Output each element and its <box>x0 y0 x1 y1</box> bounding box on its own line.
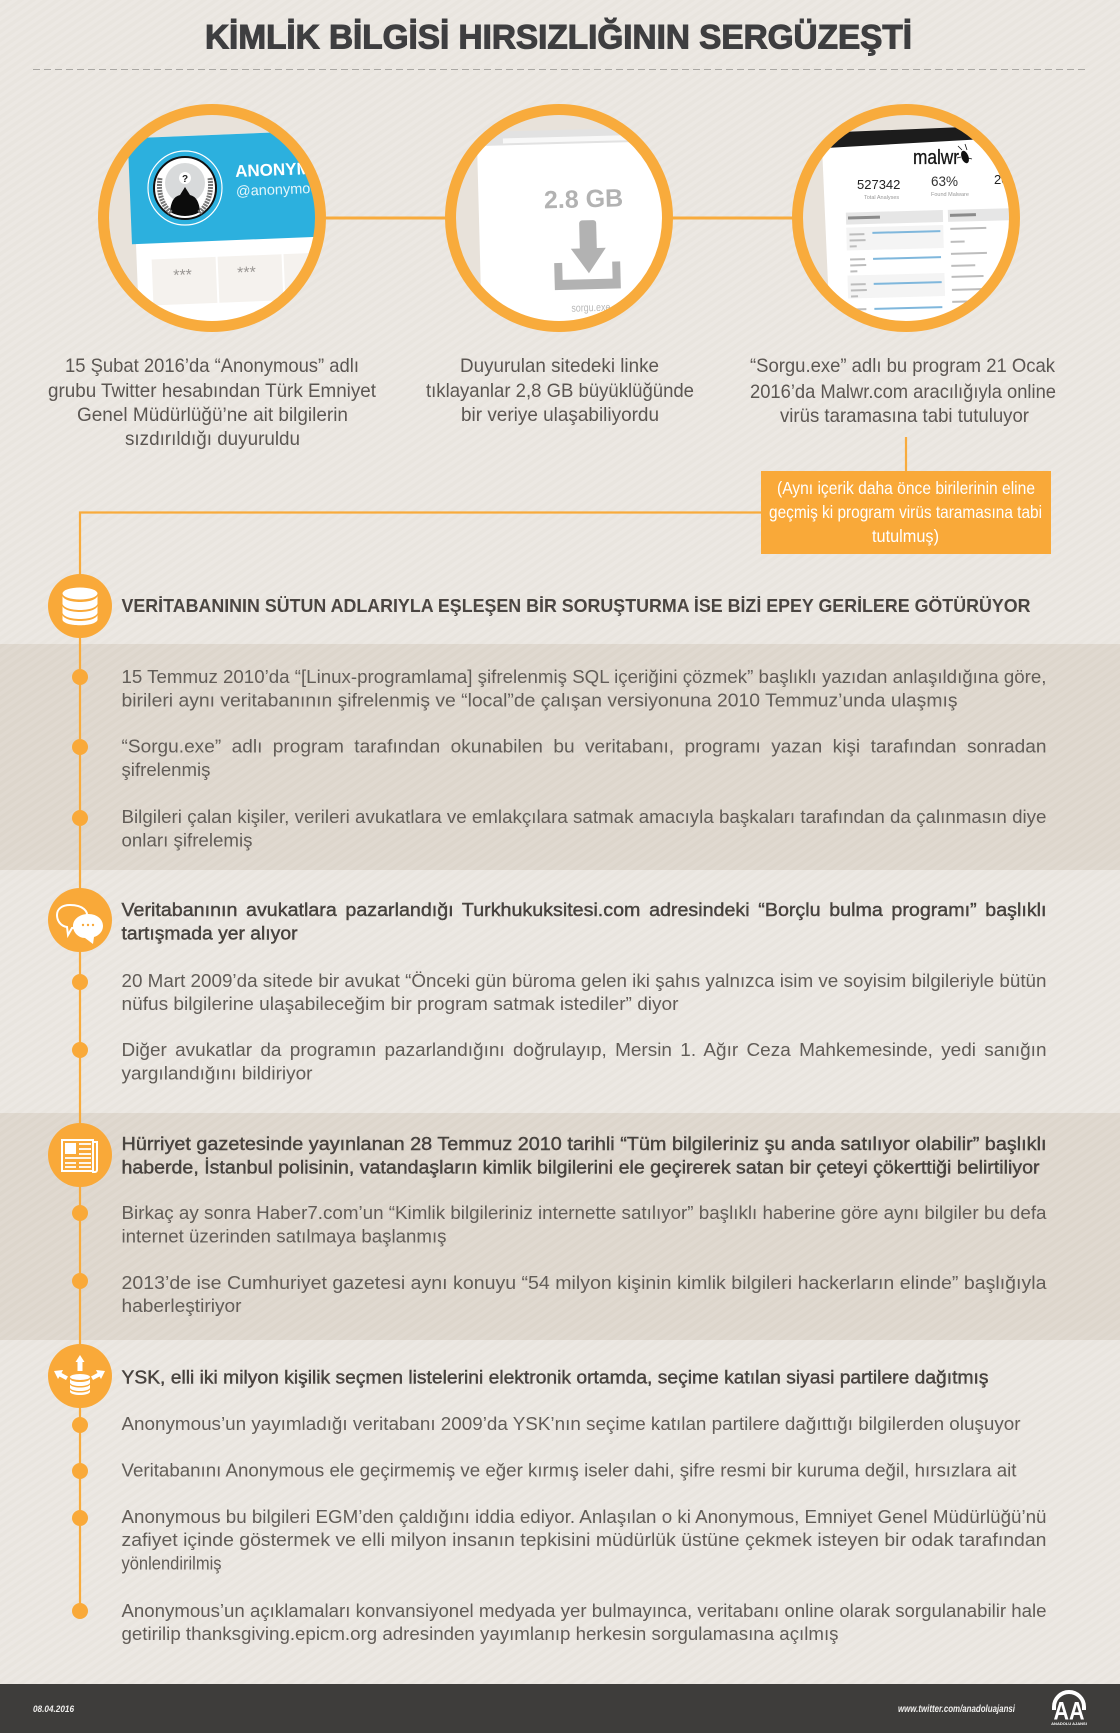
panel: twitter circle: @anonymous <box>236 180 326 200</box>
heading <box>122 1133 1046 1178</box>
callout <box>761 471 1051 554</box>
text block: caption 1: sızdırıldığı duyuruldu <box>125 428 300 450</box>
text block: Veritabanını Anonymous ele geçirmemiş ve eğer kırmış iseler dahi, şifre resmi bir kuruma değil, hırsızlara ait <box>122 1460 1017 1480</box>
icon: database with arrows <box>48 1344 112 1408</box>
text block: caption 2: Duyurulan sitedeki linke <box>460 355 659 377</box>
icon: speech bubbles <box>48 888 112 952</box>
text block: Anonymous’un açıklamaları konvansiyonel medyada yer bulmayınca, veritabanı online olarak sorgulanabilir hale <box>122 1600 1046 1621</box>
text block: şifrelenmiş <box>122 759 210 780</box>
text block: internet üzerinden satılmaya başlanmış <box>122 1226 446 1246</box>
text block: Bilgileri çalan kişiler, verileri avukatlara ve emlakçılara satmak amacıyla başkaları tarafından da çalınmasın diye <box>122 806 1046 827</box>
panel: download circle: 2.8 GB <box>544 184 623 214</box>
panel: malwr circle: 527342 <box>857 177 900 192</box>
text block: caption 3: virüs taramasına tabi tutuluyor <box>780 405 1030 427</box>
text block: yönlendirilmiş <box>122 1552 222 1574</box>
panel: malwr circle: 20 <box>994 172 1008 187</box>
text block: caption 1: 15 Şubat 2016’da “Anonymous” adlı <box>65 355 359 377</box>
footer <box>0 1684 1120 1733</box>
text block: “Sorgu.exe” adlı program tarafından okunabilen bu veritabanı, programı yazan kişi tarafından sonradan <box>122 736 1046 756</box>
heading: haberde, İstanbul polisinin, vatandaşların kimlik bilgilerini ele geçirerek satan bir çeteyi çökerttiği belirtiliyor <box>122 1156 1040 1178</box>
icon: newspaper <box>48 1123 112 1187</box>
panel: section 2 <box>48 888 1046 1084</box>
icon: database <box>48 574 112 638</box>
text block: 2013’de ise Cumhuriyet gazetesi aynı konuyu “54 milyon kişinin kimlik bilgileri hackerların elinde” başlığıyla <box>122 1272 1047 1293</box>
text block: caption 2: tıklayanlar 2,8 GB büyüklüğünde <box>426 380 694 402</box>
text block: getirilip thanksgiving.epicm.org adresinden yayımlanıp herkesin sorgulamasına açılmış <box>122 1623 838 1644</box>
title: KİMLİK BİLGİSİ HIRSIZLIĞININ SERGÜZEŞTİ <box>205 18 912 56</box>
text block: birileri aynı veritabanının şifrelenmiş ve “local”de çalışan versiyonuna 2010 Temmuz’unda ulaşmış <box>122 690 958 710</box>
twitter link: www.twitter.com/anadoluajansi <box>898 1703 1016 1715</box>
panel: malwr circle: Total Analyses <box>864 195 899 201</box>
text block: Anonymous’un yayımladığı veritabanı 2009’da YSK’nın seçime katılan partilere dağıttığı bilgilerden oluşuyor <box>122 1413 1020 1434</box>
heading: Veritabanının avukatlara pazarlandığı Turkhukuksitesi.com adresindeki “Borçlu bulma programı” başlıklı <box>122 899 1046 920</box>
text block: nüfus bilgilerine ulaşabileceğim bir program satmak istediler” diyor <box>122 993 678 1014</box>
panel: twitter circle: ANONYMOUS <box>235 158 348 181</box>
text block: caption 1: Genel Müdürlüğü’ne ait bilgilerin <box>77 404 348 426</box>
heading: Hürriyet gazetesinde yayınlanan 28 Temmuz 2010 tarihli “Tüm bilgileriniz şu anda satılıyor olabilir” başlıklı <box>122 1133 1046 1154</box>
icon: download arrow <box>570 220 606 274</box>
callout: (Aynı içerik daha önce birilerinin eline <box>777 478 1035 498</box>
text block: 15 Temmuz 2010’da “[Linux-programlama] şifrelenmiş SQL içeriğini çözmek” başlıklı yazıdan anlaşıldığına göre, <box>122 666 1046 687</box>
panel: download circle <box>450 110 692 336</box>
icon: anonymous emblem <box>148 151 222 225</box>
text block: haberleştiriyor <box>122 1295 242 1316</box>
bullets <box>72 669 88 826</box>
text block: onları şifrelemiş <box>122 830 252 850</box>
panel: malwr circle: 63% <box>931 174 958 189</box>
heading: VERİTABANININ SÜTUN ADLARIYLA EŞLEŞEN BİR SORUŞTURMA İSE BİZİ EPEY GERİLERE GÖTÜRÜYOR <box>122 595 1031 616</box>
text block: Diğer avukatlar da programın pazarlandığını doğrulayıp, Mersin 1. Ağır Ceza Mahkemesinde, yedi sanığın <box>122 1039 1046 1060</box>
text block <box>122 666 1046 850</box>
bullets <box>72 974 88 1058</box>
text block: caption 3 <box>750 355 1056 427</box>
callout: tutulmuş) <box>872 526 939 546</box>
callout: geçmiş ki program virüs taramasına tabi <box>769 502 1042 522</box>
timeline line <box>80 437 906 1611</box>
date: 08.04.2016 <box>33 1704 75 1715</box>
panel: section 4 <box>48 1344 1046 1644</box>
panel: twitter circle <box>98 104 326 332</box>
text block: yargılandığını bildiriyor <box>122 1062 312 1084</box>
text block <box>122 970 1046 1084</box>
panel: section 3 <box>48 1123 1047 1316</box>
heading <box>122 899 1046 944</box>
panel: download circle: sorgu.exe <box>571 302 611 315</box>
text block: 20 Mart 2009’da sitede bir avukat “Önceki gün büroma gelen iki şahıs yalnızca isim ve soyisim bilgileriyle bütün <box>122 970 1046 991</box>
bullets <box>72 1205 88 1289</box>
panel: twitter circle: *** <box>237 264 256 282</box>
text block: caption 1: grubu Twitter hesabından Türk Emniyet <box>48 380 377 402</box>
text block <box>122 1202 1047 1316</box>
text block: caption 2: bir veriye ulaşabiliyordu <box>461 404 659 426</box>
text block: zafiyet içinde göstermek ve elli milyon insanın tepkisini müdürlük üstüne çekmek isteyen bir odak tarafından <box>122 1529 1046 1550</box>
icon: bug <box>957 144 972 164</box>
text block: caption 3: “Sorgu.exe” adlı bu program 21 Ocak <box>750 355 1055 377</box>
logo: anadolu ajansi: ANADOLU AJANSI <box>1051 1721 1087 1726</box>
text block: Anonymous bu bilgileri EGM’den çaldığını iddia ediyor. Anlaşılan o ki Anonymous, Emniyet Genel Müdürlüğü’nü <box>122 1506 1046 1527</box>
bullets <box>72 1417 88 1619</box>
heading: tartışmada yer alıyor <box>122 922 298 944</box>
panel: twitter circle: *** <box>173 267 192 285</box>
icon: anonymous emblem: ? <box>182 174 188 185</box>
logo: anadolu ajansi: AA <box>1054 1698 1084 1726</box>
panel: section 1 <box>48 574 1046 850</box>
text block: Birkaç ay sonra Haber7.com’un “Kimlik bilgileriniz internette satılıyor” başlıklı haberine göre aynı bilgiler bu defa <box>122 1202 1047 1223</box>
text block: caption 2 <box>426 355 694 426</box>
text block: caption 3: 2016’da Malwr.com aracılığıyla online <box>750 381 1056 403</box>
connector: circles <box>320 216 798 220</box>
panel: malwr circle: Found Malware <box>931 192 969 198</box>
text block: caption 1 <box>48 355 377 450</box>
heading: YSK, elli iki milyon kişilik seçmen listelerini elektronik ortamda, seçime katılan siyasi partilere dağıtmış <box>122 1366 988 1388</box>
text block <box>122 1413 1046 1644</box>
panel: malwr circle: malwr <box>913 147 959 169</box>
panel: malwr circle <box>798 110 1030 330</box>
